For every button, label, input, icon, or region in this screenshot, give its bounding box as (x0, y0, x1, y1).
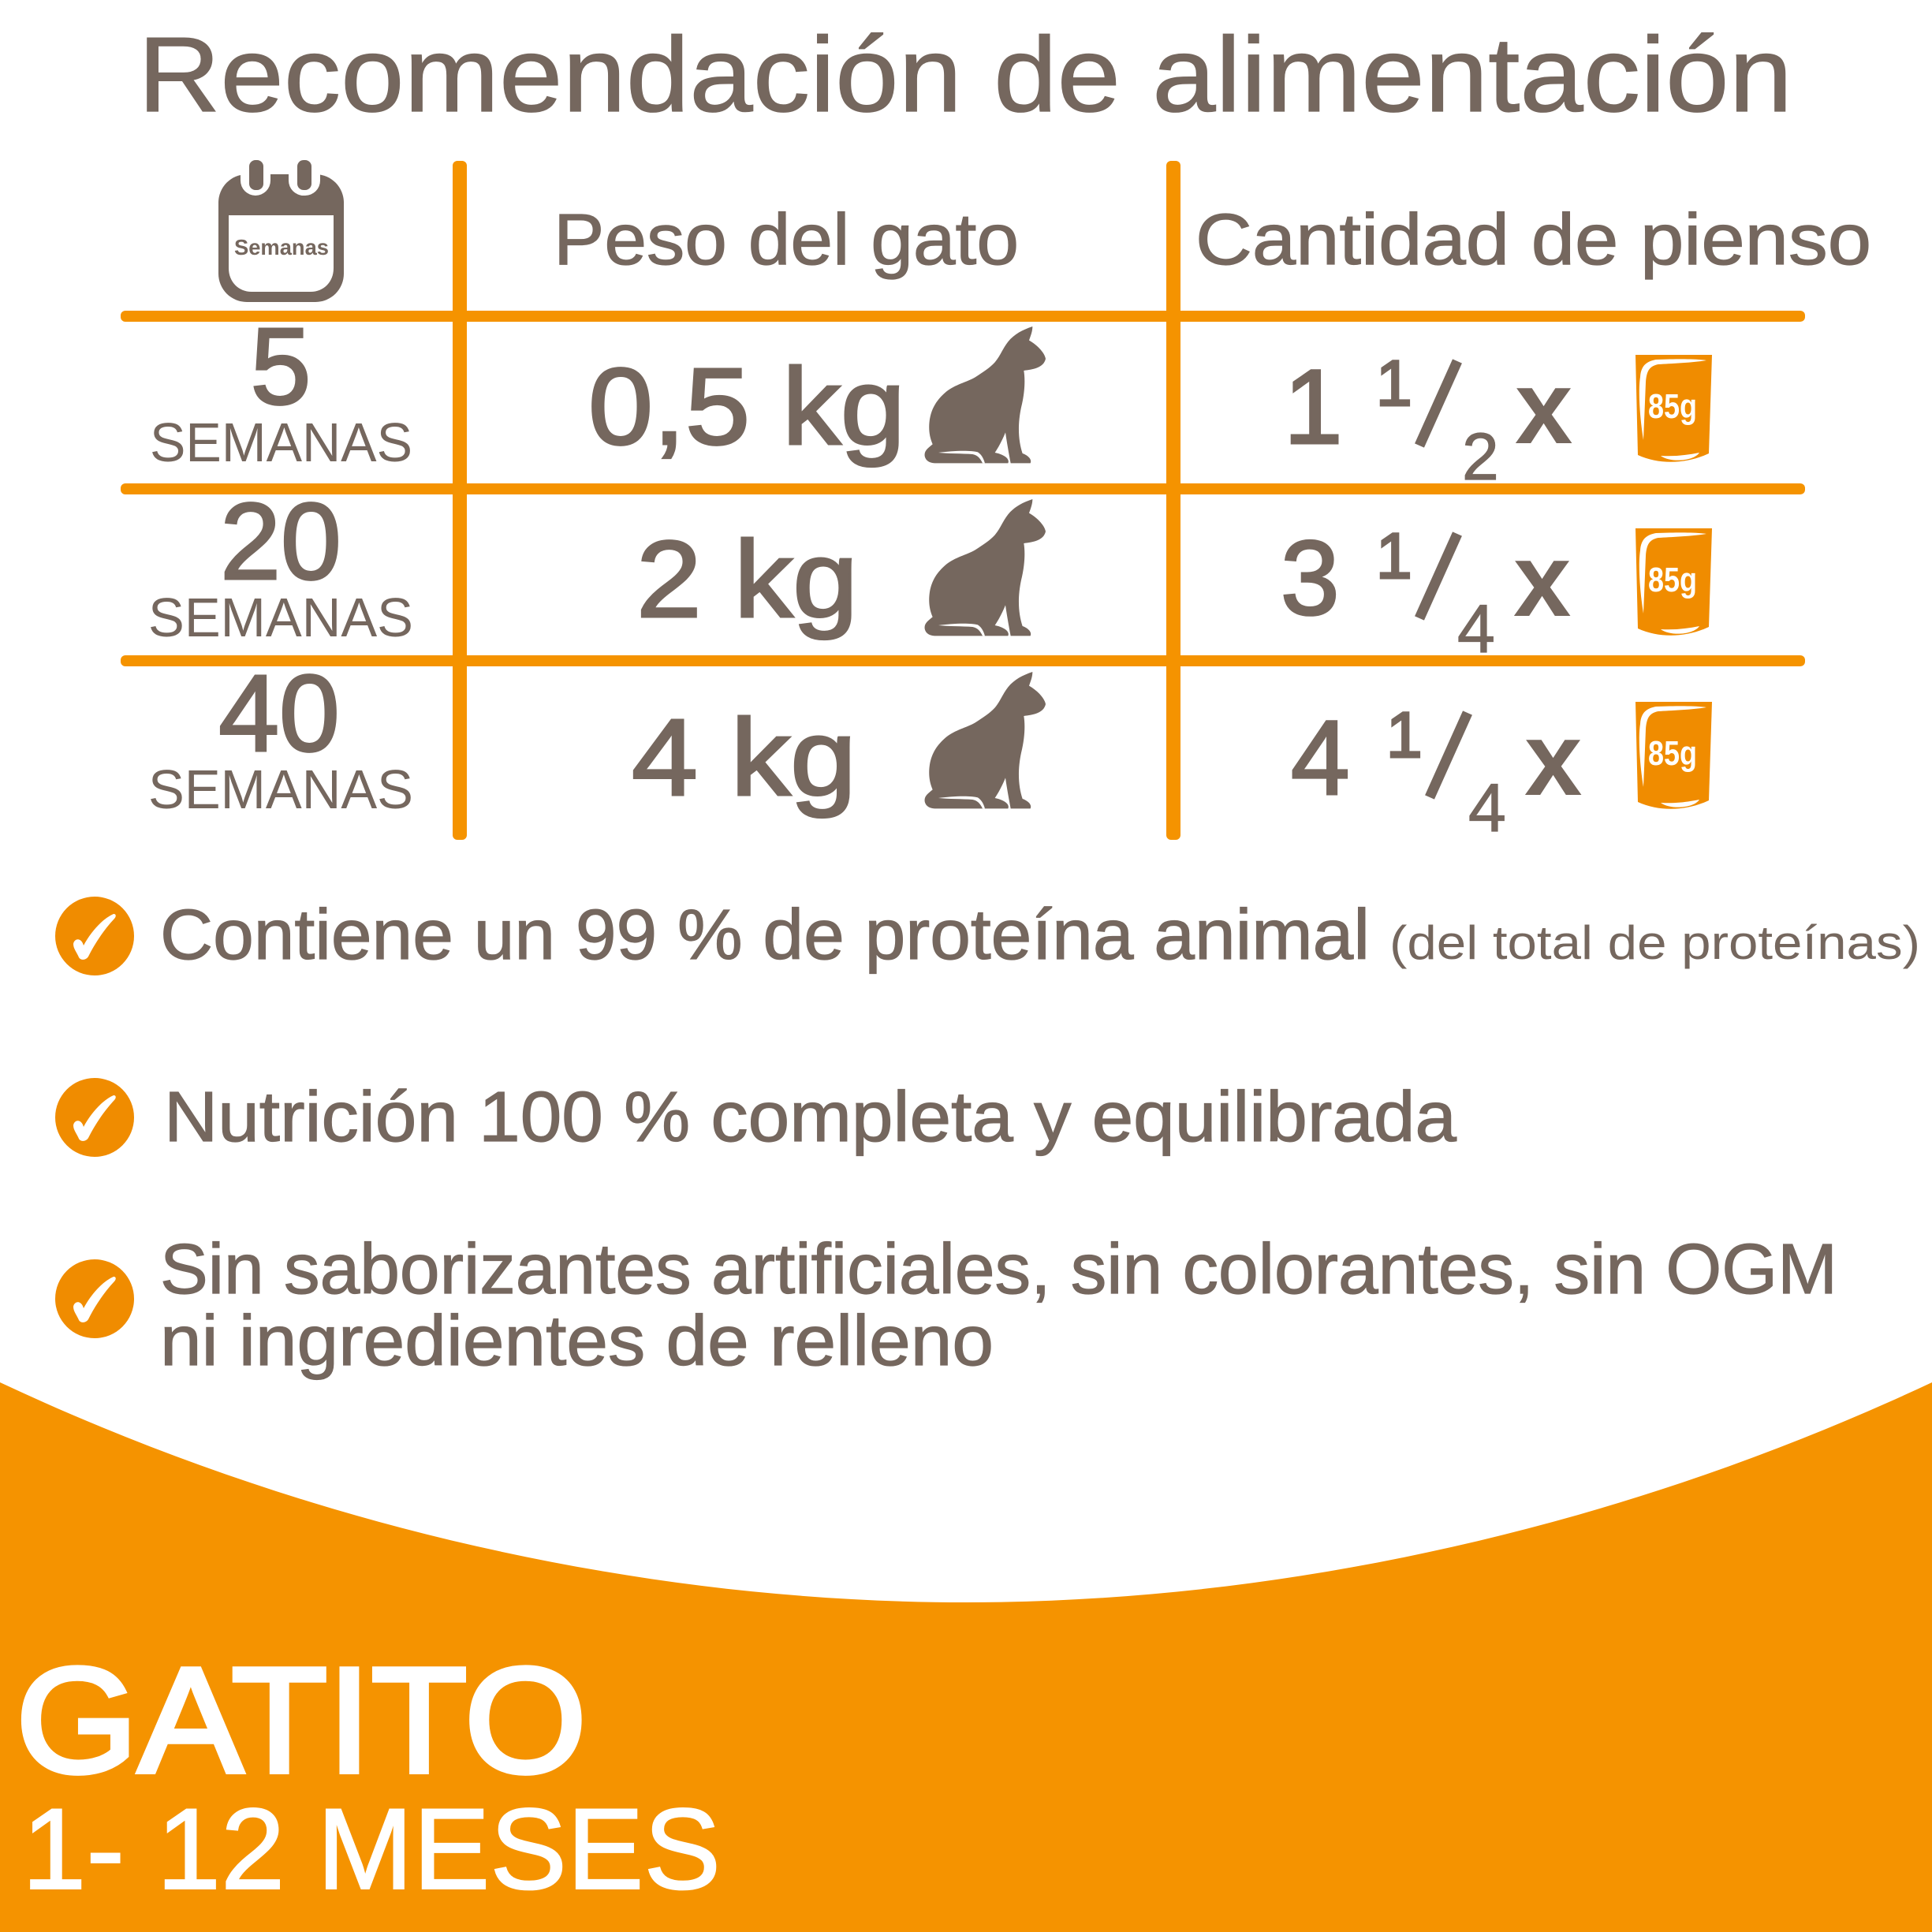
icon: cat (925, 326, 1046, 463)
benefit text: (del total de proteínas) (1389, 916, 1920, 969)
benefit: nutrición completa (55, 1078, 1457, 1157)
benefit: sin saborizantes (55, 1230, 1837, 1381)
age 20: 20 (220, 481, 341, 602)
icon: calendar (218, 150, 344, 302)
quantity 1 1/2 x: x (1515, 349, 1572, 465)
quantity 3 1/4 x: 4 (1457, 591, 1495, 667)
weight 4 kg: 4 kg (632, 697, 856, 819)
quantity 3 1/4 x: x (1513, 522, 1571, 638)
quantity 1 1/2 x: 1 (1376, 348, 1412, 420)
age 5: SEMANAS (150, 412, 412, 473)
quantity 1 1/2 x: 1 (1284, 349, 1343, 466)
age 5: 5 (251, 306, 311, 427)
quantity 3 1/4 x: 3 (1281, 520, 1340, 637)
benefit text (160, 1230, 1837, 1381)
icon: check (55, 1259, 134, 1338)
header: peso del gato: Peso del gato (554, 200, 1019, 280)
row: 20 semanas (148, 481, 1712, 667)
icon: cat (925, 672, 1046, 808)
table grid lines (121, 161, 1805, 840)
footer subheading: meses: 1- 12 MESES (22, 1785, 721, 1913)
icon: check (55, 897, 134, 975)
quantity 4 1/4 x (1291, 699, 1582, 846)
quantity 3 1/4 x (1281, 520, 1571, 667)
quantity 3 1/4 x: 1 (1376, 520, 1412, 592)
title: Recomendación de alimentación (138, 15, 1792, 134)
benefit: proteína animal (55, 896, 1920, 975)
quantity 1 1/2 x: 2 (1462, 420, 1499, 494)
icon: 85g pouch (1635, 355, 1712, 462)
header: cantidad de pienso: Cantidad de pienso (1195, 200, 1871, 280)
weight 0,5 kg: 0,5 kg (588, 346, 905, 468)
age 20: SEMANAS (148, 587, 413, 648)
benefit text: Sin saborizantes artificiales, sin colorantes, sin OGM (160, 1230, 1837, 1309)
icon: 85g pouch (1635, 528, 1712, 636)
benefit text (160, 896, 1920, 975)
icon: 85g pouch: 85g (1648, 734, 1697, 773)
icon: 85g pouch: 85g (1648, 387, 1697, 426)
quantity 1 1/2 x (1284, 348, 1572, 494)
quantity 4 1/4 x: 4 (1468, 770, 1506, 846)
benefit text: ni ingredientes de relleno (160, 1302, 994, 1381)
benefit text: Contiene un 99 % de proteína animal (160, 896, 1370, 975)
quantity 4 1/4 x: 1 (1386, 699, 1423, 771)
benefit text: Nutrición 100 % completa y equilibrada (164, 1078, 1457, 1157)
age 40 (148, 653, 413, 820)
icon: 85g pouch: 85g (1648, 561, 1697, 599)
icon: 85g pouch (1635, 702, 1712, 809)
feeding table (121, 150, 1871, 846)
quantity 4 1/4 x: 4 (1291, 699, 1350, 817)
age 40: SEMANAS (148, 759, 413, 820)
orange footer band (0, 1382, 1932, 1932)
age 5 (150, 306, 412, 473)
icon: cat (925, 499, 1046, 636)
weight 2 kg: 2 kg (636, 519, 858, 640)
icon: calendar: Semanas (234, 235, 329, 259)
footer heading: gatito: GATITO (16, 1637, 587, 1804)
icon: check (55, 1078, 134, 1157)
age 20 (148, 481, 413, 648)
row: 5 semanas (150, 306, 1712, 494)
age 40: 40 (218, 653, 340, 774)
row: 40 semanas (148, 653, 1712, 846)
quantity 4 1/4 x: x (1524, 701, 1582, 817)
